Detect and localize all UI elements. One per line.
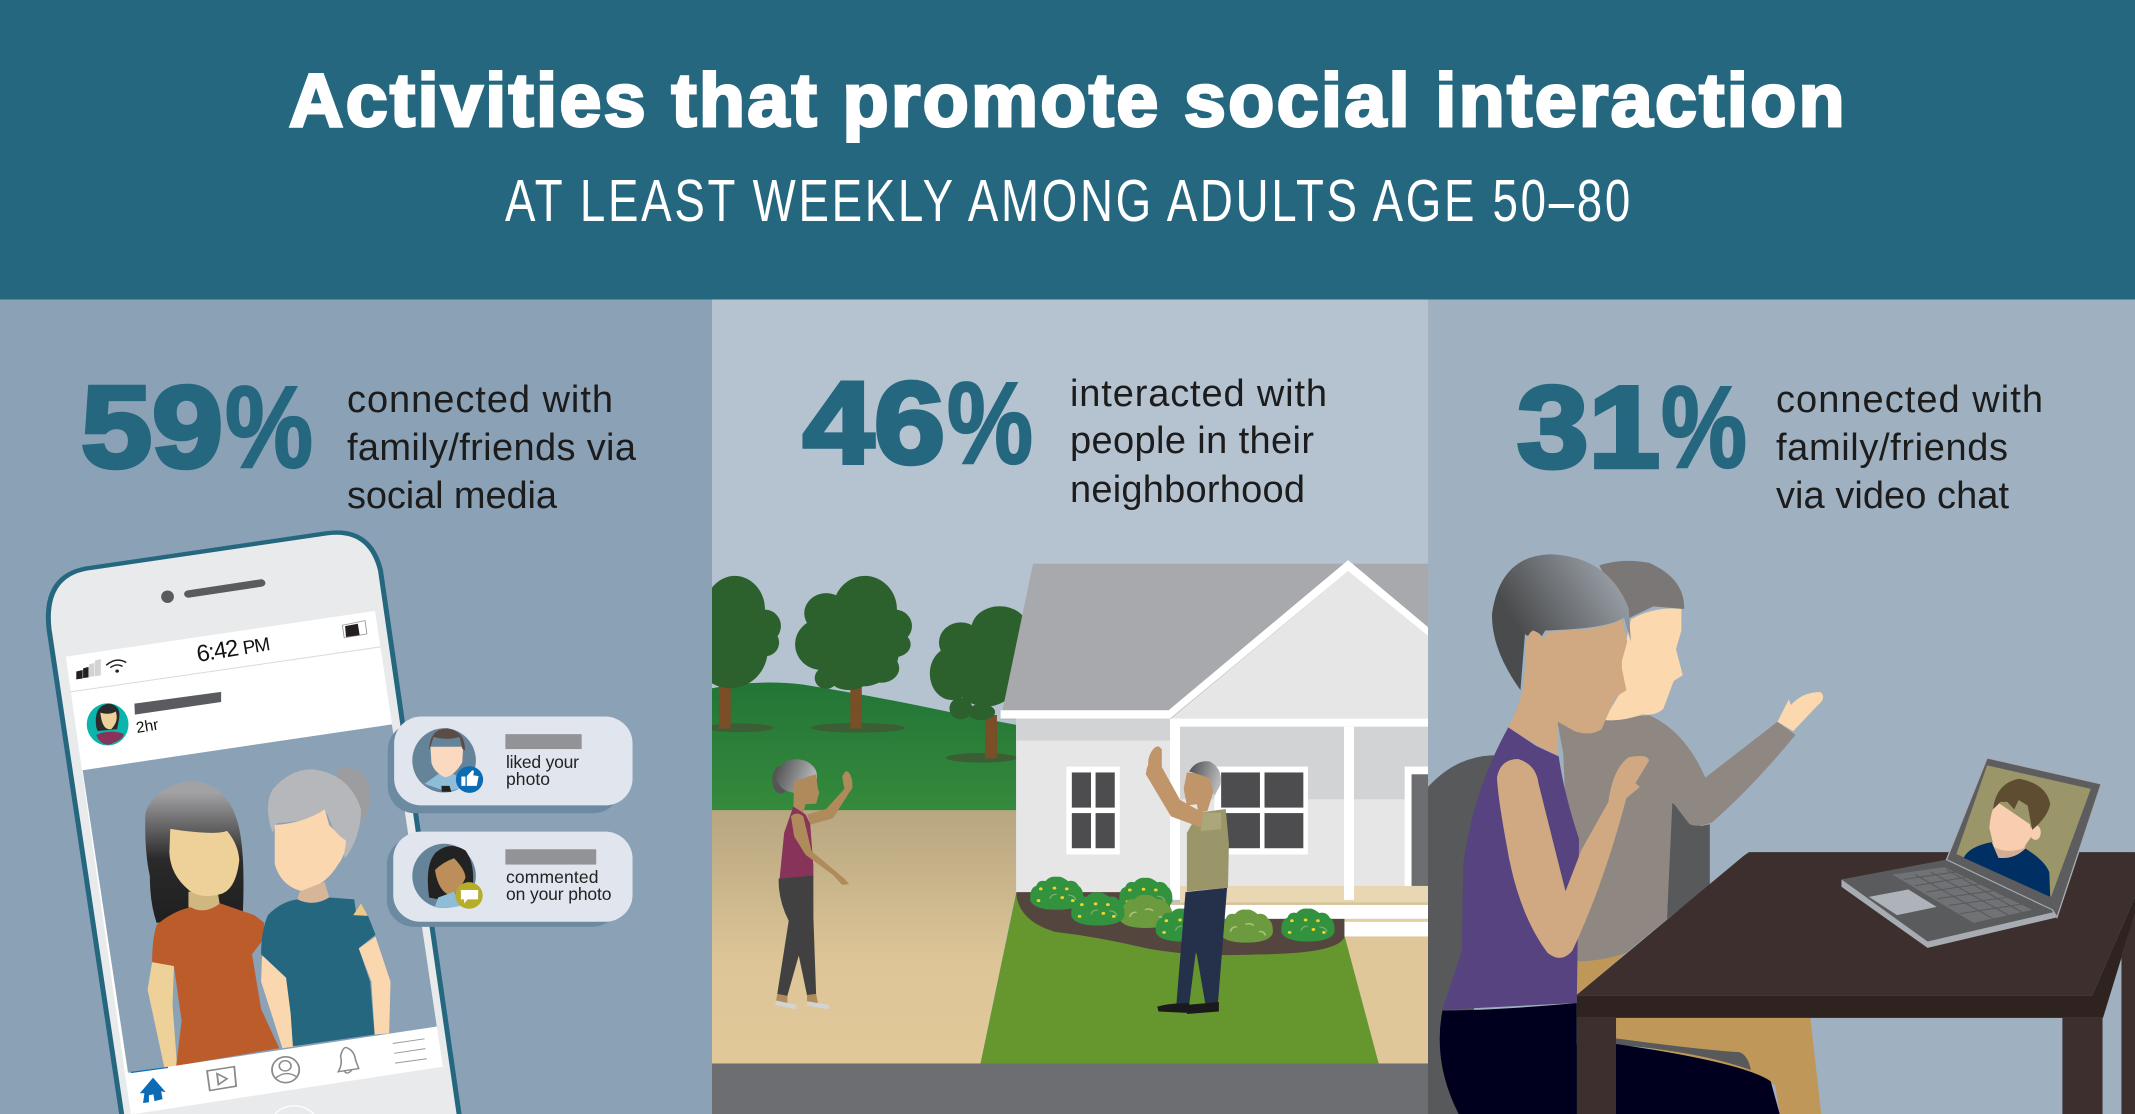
description: neighborhood: interacted with xyxy=(1070,373,1327,415)
panel: video chat xyxy=(1428,300,2135,1114)
stat: 59%: 59 xyxy=(81,362,223,492)
table xyxy=(1577,852,2135,1114)
stat: 46%: 46 xyxy=(803,358,945,488)
notification: commented on your photo: on your photo xyxy=(506,884,612,904)
stat: 59% xyxy=(81,362,313,492)
subtitle: AT LEAST WEEKLY AMONG ADULTS AGE 50–80 xyxy=(505,168,1633,234)
illustration: smartphone xyxy=(48,533,461,1114)
notification: liked your photo xyxy=(388,717,633,813)
panel: neighborhood xyxy=(693,300,1428,1114)
post age: 2hr xyxy=(135,717,160,737)
driveway, lawn and road xyxy=(712,810,1428,1114)
man xyxy=(1557,561,1823,1114)
stat: 31%: 31 xyxy=(1517,362,1660,492)
woman xyxy=(1440,554,1780,1114)
notification: liked your photo: photo xyxy=(506,769,550,789)
title: Activities that promote social interaction xyxy=(289,58,1847,142)
stat: 59%: % xyxy=(225,362,313,492)
house xyxy=(1001,560,1428,936)
woman waving xyxy=(772,759,853,1009)
laptop xyxy=(1841,758,2101,948)
description: video chat: via video chat xyxy=(1776,475,2009,517)
description: video chat: family/friends xyxy=(1776,427,2008,469)
description: neighborhood: neighborhood xyxy=(1070,469,1305,511)
status time: 6:42 PM xyxy=(195,629,272,667)
description: video chat xyxy=(1776,379,2043,517)
flower bed xyxy=(1016,877,1344,955)
illustration: house and neighbors waving xyxy=(693,560,1428,1114)
description: social media: connected with xyxy=(347,379,613,421)
hill and trees xyxy=(693,576,1028,811)
panel: social media xyxy=(0,300,712,1114)
description: neighborhood: people in their xyxy=(1070,420,1314,462)
stat: 31%: % xyxy=(1661,362,1747,492)
stat: 31% xyxy=(1517,362,1747,492)
illustration: couple on video chat xyxy=(1428,554,2135,1114)
description: neighborhood xyxy=(1070,373,1327,511)
chairs xyxy=(1428,755,1710,1114)
notification: liked your photo: liked your xyxy=(506,752,579,772)
stat: 46% xyxy=(803,358,1033,488)
man waving xyxy=(1146,745,1229,1014)
description: social media xyxy=(347,379,637,517)
description: video chat: connected with xyxy=(1776,379,2043,421)
description: social media: family/friends via xyxy=(347,427,637,469)
header band xyxy=(0,0,2135,300)
description: social media: social media xyxy=(347,475,558,517)
stat: 46%: % xyxy=(947,358,1033,488)
notification: commented on your photo xyxy=(387,832,633,927)
notification: commented on your photo: commented xyxy=(506,867,598,887)
